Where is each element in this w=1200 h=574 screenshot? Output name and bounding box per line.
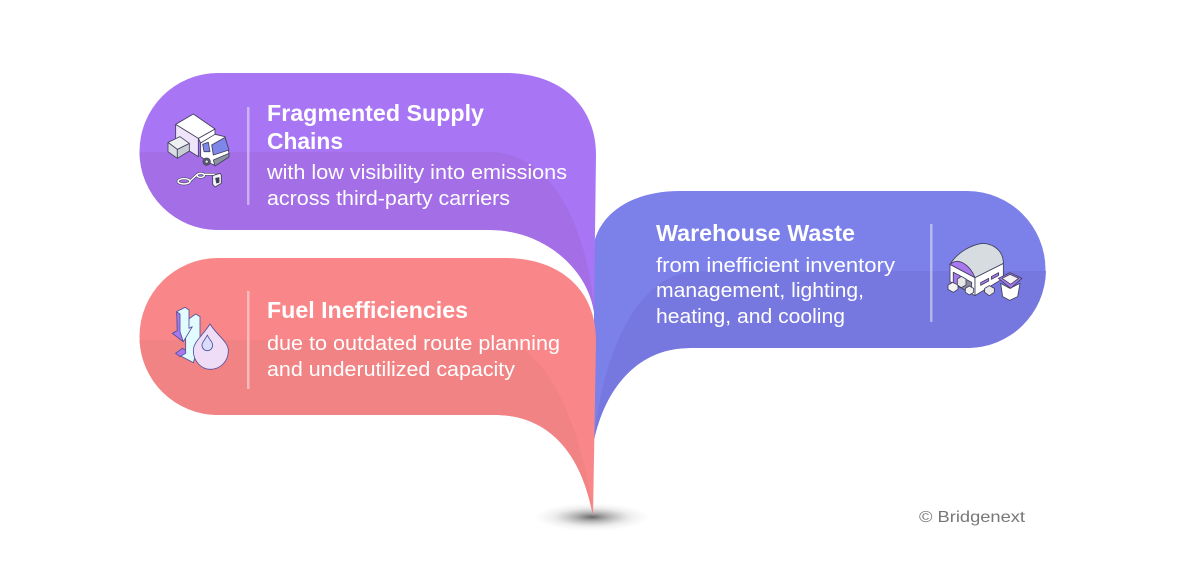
text: fuel inefficiencies description: and underutilized capacity bbox=[267, 359, 515, 381]
icon: falling arrows and fuel drop bbox=[172, 307, 228, 369]
heading: warehouse waste: Warehouse Waste bbox=[656, 220, 855, 246]
text: fragmented supply chains description: across third-party carriers bbox=[267, 188, 510, 210]
icon: delivery truck with broken chain bbox=[168, 114, 229, 187]
heading: fuel inefficiencies: Fuel Inefficiencies bbox=[267, 297, 468, 323]
divider bbox=[247, 107, 250, 205]
text: fragmented supply chains description bbox=[266, 162, 567, 210]
panel: warehouse waste bbox=[594, 191, 1046, 440]
ground shadow bbox=[534, 503, 650, 531]
copyright: © Bridgenext bbox=[919, 509, 1026, 526]
text: warehouse waste description: management, lighting, bbox=[656, 280, 864, 302]
text: fuel inefficiencies description bbox=[267, 333, 560, 381]
text: fuel inefficiencies description: due to outdated route planning bbox=[267, 333, 560, 355]
heading: fragmented supply chains: Chains bbox=[267, 128, 343, 154]
text: warehouse waste description bbox=[656, 255, 895, 328]
icon: warehouse and waste bin bbox=[948, 243, 1022, 300]
text: warehouse waste description: from inefficient inventory bbox=[656, 255, 895, 277]
text: warehouse waste description: heating, and cooling bbox=[656, 306, 845, 328]
divider bbox=[247, 291, 250, 389]
divider bbox=[930, 224, 932, 322]
heading: fragmented supply chains bbox=[267, 100, 484, 154]
panel: fuel inefficiencies bbox=[140, 258, 596, 516]
text: fragmented supply chains description: with low visibility into emissions bbox=[266, 162, 567, 184]
heading: fragmented supply chains: Fragmented Supply bbox=[267, 100, 484, 126]
panel: fragmented supply chains bbox=[140, 73, 596, 312]
